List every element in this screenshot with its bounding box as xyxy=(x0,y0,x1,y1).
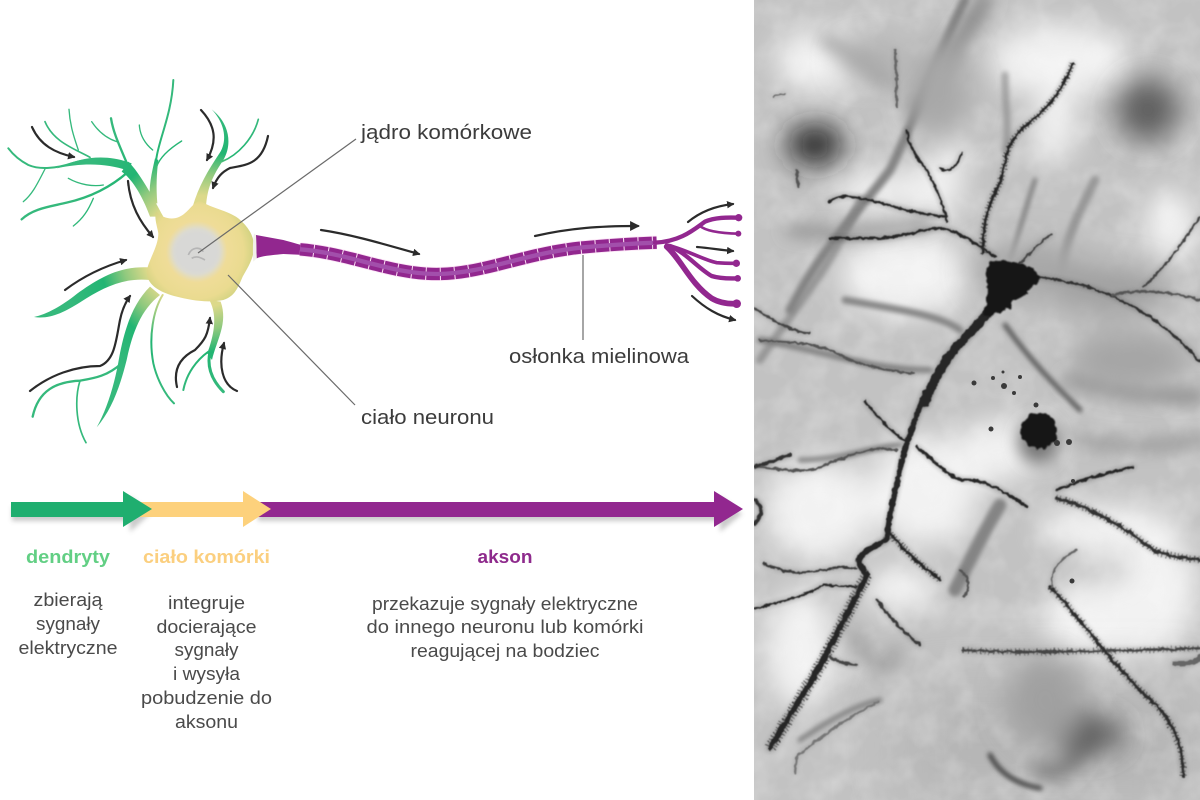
text: cell body description: sygnały xyxy=(174,640,238,660)
text: cell body description: docierające xyxy=(156,617,256,637)
heading: cell body: ciało komórki xyxy=(143,547,270,567)
tapered dendrite trunks xyxy=(34,109,228,427)
main neuron soma xyxy=(982,260,1038,316)
label: cell body: ciało neuronu xyxy=(361,406,494,429)
yellow arrow: cell body xyxy=(140,491,271,527)
label: nucleus: jądro komórkowe xyxy=(360,121,532,144)
granule dots xyxy=(972,370,1075,584)
text: dendrites description: elektryczne xyxy=(18,638,118,658)
text: cell body description: pobudzenie do xyxy=(141,688,272,708)
text: axon description: do innego neuronu lub komórki xyxy=(366,617,644,637)
text: axon description: reagującej na bodziec xyxy=(410,641,600,661)
lower photo tone xyxy=(913,700,1187,790)
text: axon description: przekazuje sygnały elektryczne xyxy=(372,594,638,614)
dendrite halo xyxy=(755,50,1200,777)
arrow shadow xyxy=(12,496,742,532)
cell body xyxy=(147,201,254,301)
out-of-focus dark neurons and streaks xyxy=(760,0,1200,788)
light patches xyxy=(765,24,1196,710)
signal arrows xyxy=(30,110,735,391)
text: cell body description: aksonu xyxy=(175,712,238,732)
text: dendrites description xyxy=(18,590,118,658)
flow arrow bar xyxy=(11,491,743,532)
cell nucleus xyxy=(173,229,221,274)
mottled texture xyxy=(754,0,1200,800)
text: dendrites description: sygnały xyxy=(36,614,100,634)
text: axon description xyxy=(366,594,644,661)
second neuron soma xyxy=(1018,413,1058,464)
axon terminals xyxy=(655,214,742,308)
neuron diagram xyxy=(8,80,742,443)
micrograph of neurons xyxy=(754,0,1200,800)
text: dendrites description: zbierają xyxy=(34,590,104,610)
green arrow: dendrites xyxy=(11,491,152,527)
label: myelin sheath: osłonka mielinowa xyxy=(509,345,690,368)
text: cell body description: integruje xyxy=(168,593,245,613)
heading: axon: akson xyxy=(478,547,532,567)
leader lines xyxy=(198,139,583,405)
text: cell body description xyxy=(141,593,272,732)
purple arrow: axon xyxy=(255,491,743,527)
heading: dendrites: dendryty xyxy=(26,547,110,567)
axon xyxy=(253,214,742,308)
dendrites xyxy=(8,80,258,443)
text: cell body description: i wysyła xyxy=(173,664,241,684)
main neuron dendrites xyxy=(755,50,1200,777)
